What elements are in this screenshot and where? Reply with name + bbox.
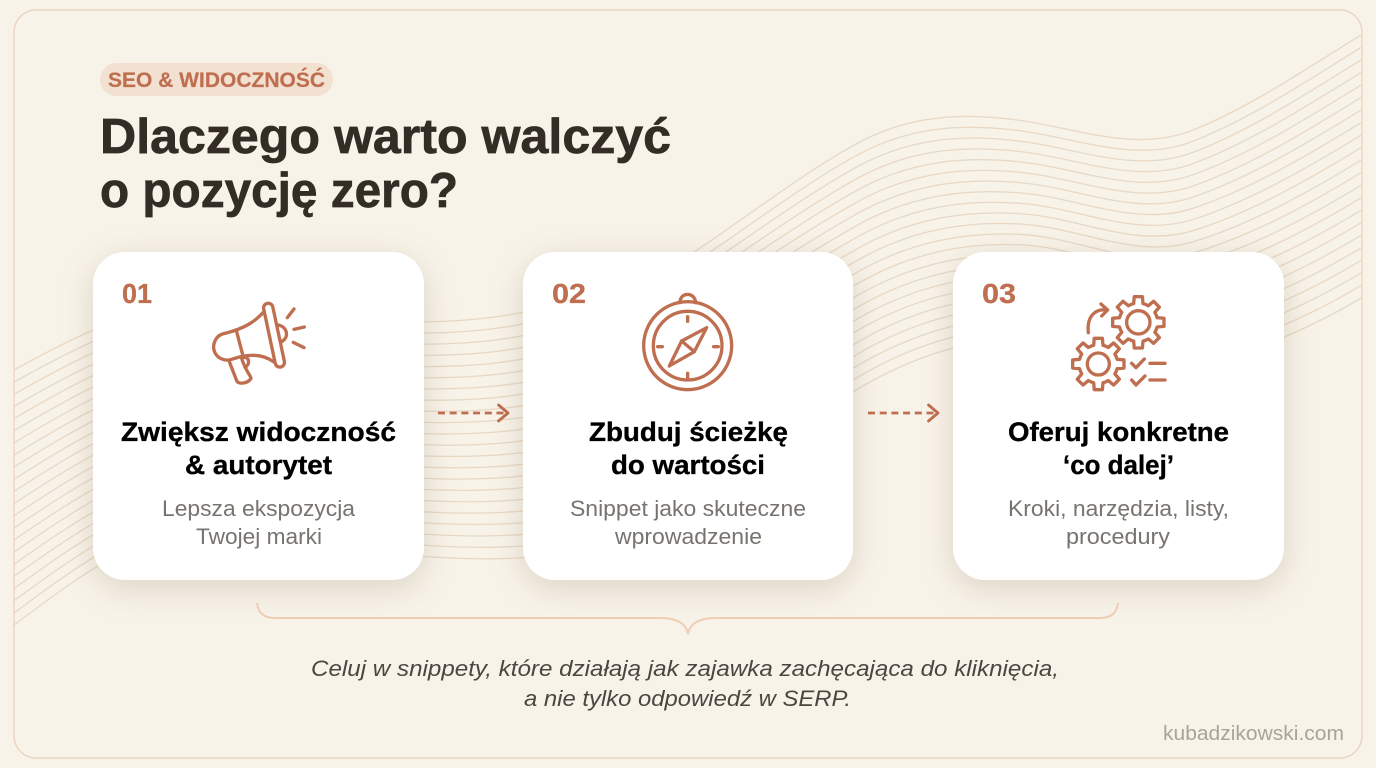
icon: gears and checklist (1073, 297, 1165, 390)
card 2 description (570, 496, 806, 549)
category tag: SEO & WIDOCZNOŚĆ (108, 68, 325, 92)
brace (257, 603, 1118, 634)
card 2 heading: Zbuduj ścieżkę (589, 417, 788, 447)
title (100, 110, 671, 218)
arrow 1 (438, 405, 508, 421)
card 2 heading: do wartości (611, 450, 765, 480)
card 1 number: 01 (122, 278, 152, 309)
card 3 heading: ‘co dalej’ (1063, 450, 1174, 480)
card 1 description (162, 496, 356, 549)
card 3 number: 03 (982, 278, 1016, 309)
closing note (311, 656, 1059, 711)
card 2 heading (589, 417, 788, 480)
card 3 description: procedury (1066, 524, 1170, 549)
closing note: a nie tylko odpowiedź w SERP. (524, 686, 851, 711)
card 1 heading: & autorytet (185, 450, 332, 480)
card 3 description: Kroki, narzędzia, listy, (1008, 496, 1229, 521)
card 2 number: 02 (552, 278, 586, 309)
category tag (100, 63, 333, 96)
card 3 heading (1008, 417, 1229, 480)
card 1 description: Twojej marki (196, 524, 322, 549)
card 2 description: Snippet jako skuteczne (570, 496, 806, 521)
panel: card 3 (953, 252, 1284, 580)
title: Dlaczego warto walczyć (100, 110, 671, 164)
source credit: kubadzikowski.com (1163, 723, 1344, 745)
panel: card 2 (523, 252, 853, 580)
card 1 heading: Zwiększ widoczność (121, 417, 396, 447)
panel: card 1 (93, 252, 424, 580)
card 3 heading: Oferuj konkretne (1008, 417, 1229, 447)
title: o pozycję zero? (100, 164, 458, 218)
card 1 heading (121, 417, 396, 480)
icon: compass (644, 294, 732, 390)
card 1 description: Lepsza ekspozycja (162, 496, 356, 521)
arrow 2 (868, 405, 938, 421)
card 3 description (1008, 496, 1229, 549)
icon: megaphone (214, 302, 304, 383)
card 2 description: wprowadzenie (614, 524, 762, 549)
closing note: Celuj w snippety, które działają jak zajawka zachęcająca do kliknięcia, (311, 656, 1059, 681)
background wave lines (14, 35, 1361, 625)
